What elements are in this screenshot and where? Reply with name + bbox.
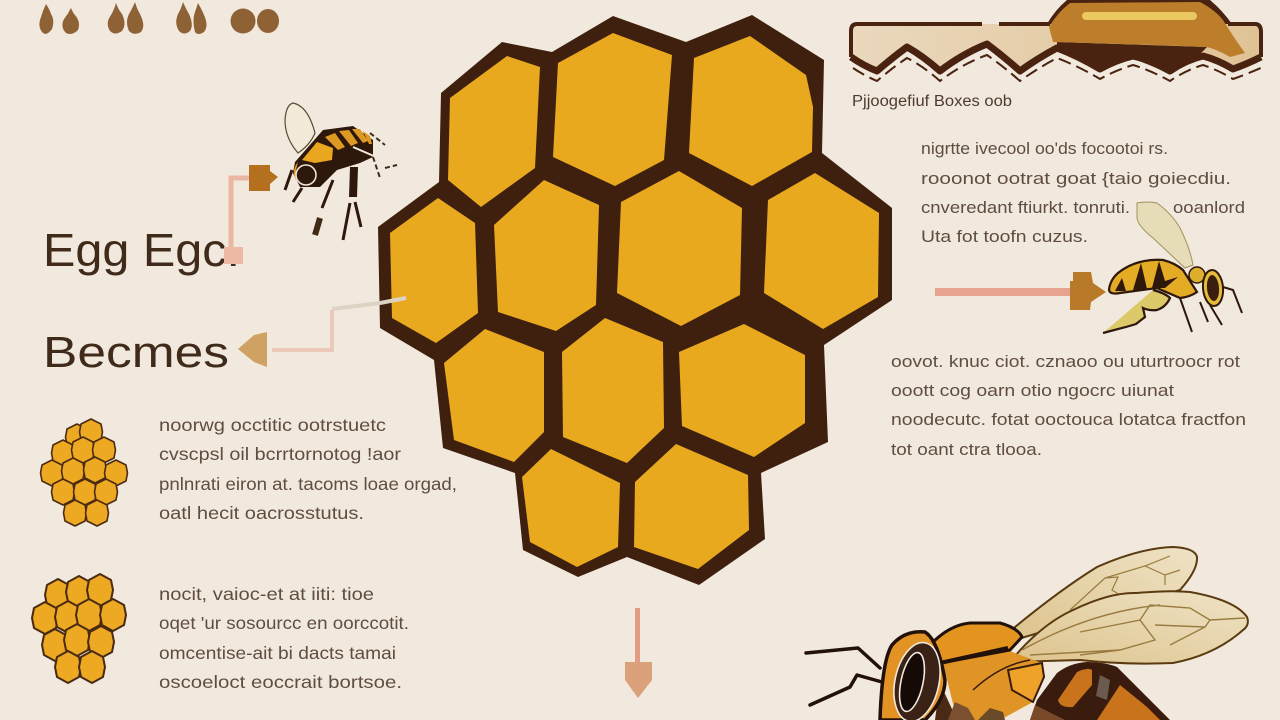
text block: left lower: omcentise-ait bi dacts tamai [159, 643, 396, 663]
dashed underline [853, 55, 1263, 81]
icon: small honeycomb one [40, 419, 128, 526]
heading: Becmes: Becmes [43, 328, 229, 377]
text block: left upper: noorwg occtitic ootrstuetc [159, 415, 386, 435]
text block: left lower: oqet 'ur sosourcc en oorccotit. [159, 613, 409, 633]
arrow: to right bee [935, 272, 1106, 310]
text block: right upper: rooonot ootrat goat {taio goiecdiu. [921, 170, 1231, 188]
head [880, 632, 945, 720]
text block: left lower: oscoeloct eoccrait bortsoe. [159, 672, 402, 692]
arrow: comb to Becmes [238, 298, 406, 367]
central honeycomb [378, 15, 892, 585]
abdomen [1030, 662, 1170, 720]
text block: right lower [891, 353, 1246, 459]
text block: right lower: tot oant ctra tlooa. [891, 441, 1042, 459]
caption: comb: Pjjoogefiuf Boxes oob [852, 93, 1012, 110]
text block: right lower: noodecutc. fotat ooctouca lotatca fractfon [891, 411, 1246, 429]
text block: right upper: cnveredant ftiurkt. tonruti. [921, 199, 1130, 217]
arrow: bee to heading [224, 165, 278, 264]
icon: large bee [806, 547, 1248, 720]
legs [948, 702, 975, 720]
text block: right upper: Uta fot toofn cuzus. [921, 228, 1088, 246]
back wing [1015, 547, 1197, 640]
front wing [1010, 591, 1248, 664]
text block: left upper [159, 415, 457, 523]
arrow: down [625, 608, 652, 698]
icon: top right comb cross-section [851, 0, 1263, 81]
text block: left upper: pnlnrati eiron at. tacoms loae orgad, [159, 474, 457, 494]
antennae [806, 648, 882, 705]
text block: left upper: oatl hecit oacrosstutus. [159, 503, 364, 523]
text block: right lower: ooott cog oarn otio ngocrc uiunat [891, 382, 1174, 400]
text block: right upper: nigrtte ivecool oo'ds focootoi rs. [921, 140, 1168, 158]
icon: small honeycomb two [32, 574, 126, 683]
text block: right upper [921, 140, 1245, 246]
text block: right upper: ooanlord [1173, 199, 1245, 217]
icon: right walking bee [1103, 202, 1242, 333]
icon: eggs row [39, 2, 279, 34]
text block: left upper: cvscpsl oil bcrrtornotog !aor [159, 444, 401, 464]
text block: left lower: nocit, vaioc-et at iiti: tioe [159, 584, 374, 604]
heading: Egg Egc: Egg Egc. [43, 224, 240, 276]
thorax [943, 650, 1045, 720]
text block: right lower: oovot. knuc ciot. cznaoo ou uturtroocr rot [891, 353, 1240, 371]
icon: small flying bee [285, 103, 397, 240]
text block: left lower [159, 584, 409, 692]
